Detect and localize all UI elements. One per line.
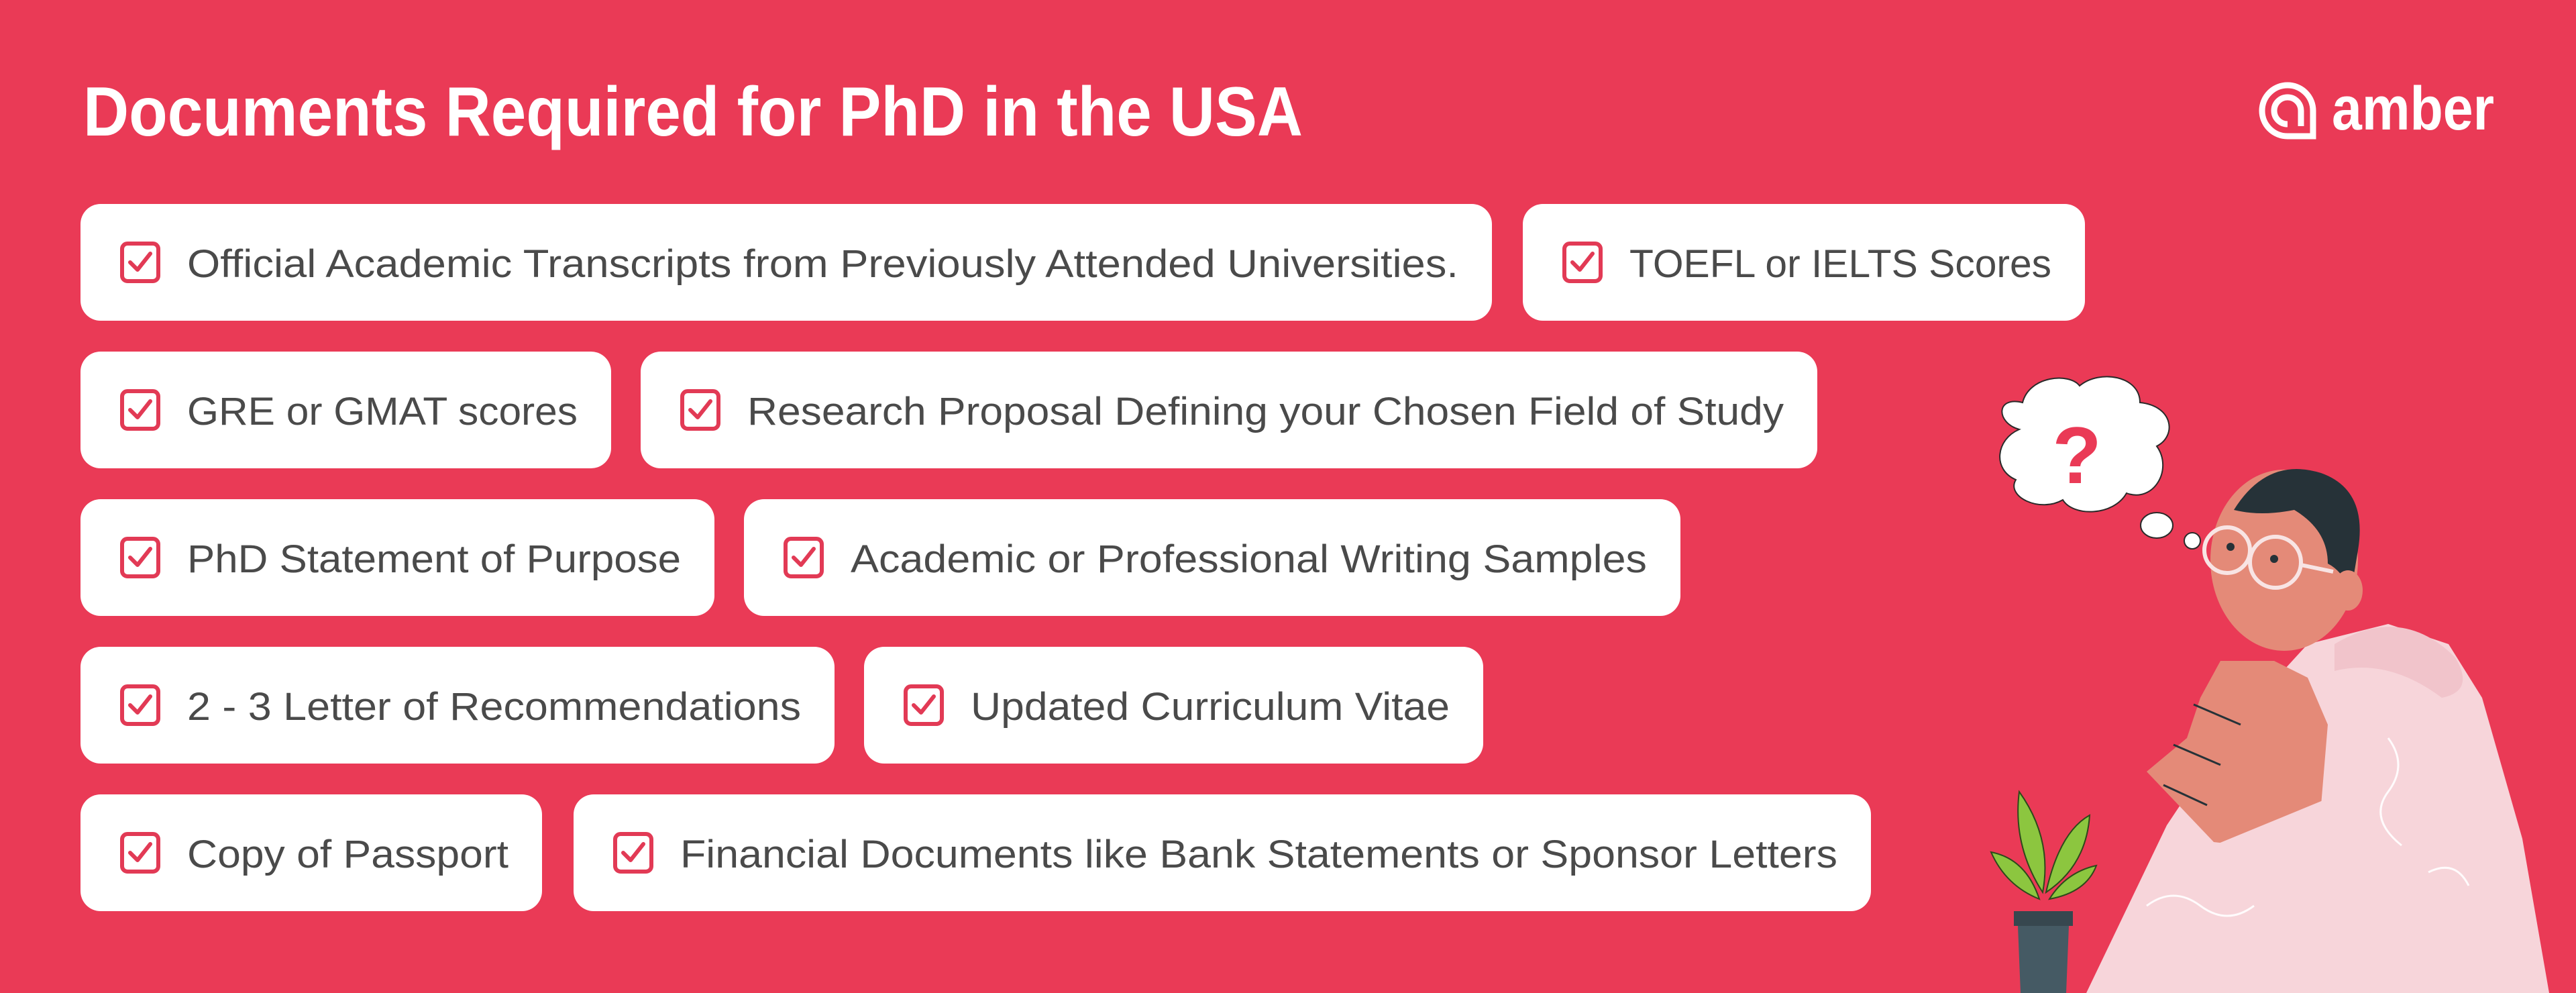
person body: hoodie xyxy=(2086,624,2549,993)
card: LORs: 2 - 3 Letter of Recommendations xyxy=(187,685,801,729)
card: writing samples xyxy=(744,499,1680,616)
hand xyxy=(2147,661,2328,849)
card: writing samples: Academic or Professional Writing Samples xyxy=(851,537,1647,581)
logo: amber xyxy=(2262,74,2494,143)
glasses xyxy=(2204,527,2333,588)
card: SOP: PhD Statement of Purpose xyxy=(187,537,681,581)
illustration: thinking person xyxy=(1991,376,2549,993)
card: CV: Updated Curriculum Vitae xyxy=(971,685,1450,729)
card: research proposal: Research Proposal Defining your Chosen Field of Study xyxy=(747,390,1784,433)
card: transcripts xyxy=(80,204,1492,321)
icon: question mark: ? xyxy=(2052,411,2102,501)
sleeve xyxy=(2180,798,2375,993)
card: GRE: GRE or GMAT scores xyxy=(187,390,578,433)
card: transcripts: Official Academic Transcripts from Previously Attended Universities. xyxy=(187,242,1458,286)
card: TOEFL xyxy=(1523,204,2085,321)
card: CV xyxy=(864,647,1483,764)
plant xyxy=(1991,792,2096,993)
card: SOP xyxy=(80,499,714,616)
card: LORs xyxy=(80,647,835,764)
person head xyxy=(2210,470,2358,651)
thought cloud xyxy=(2000,376,2200,549)
logo: amber: amber xyxy=(2332,74,2494,143)
title: Documents Required for PhD in the USA xyxy=(83,73,1303,151)
card: passport xyxy=(80,794,542,911)
card: financial xyxy=(574,794,1871,911)
card: research proposal xyxy=(641,352,1817,468)
icon: amber logo mark xyxy=(2262,85,2313,136)
card: TOEFL: TOEFL or IELTS Scores xyxy=(1629,242,2051,286)
card: financial: Financial Documents like Bank Statements or Sponsor Letters xyxy=(680,833,1837,876)
card: passport: Copy of Passport xyxy=(187,833,508,876)
card: GRE xyxy=(80,352,611,468)
